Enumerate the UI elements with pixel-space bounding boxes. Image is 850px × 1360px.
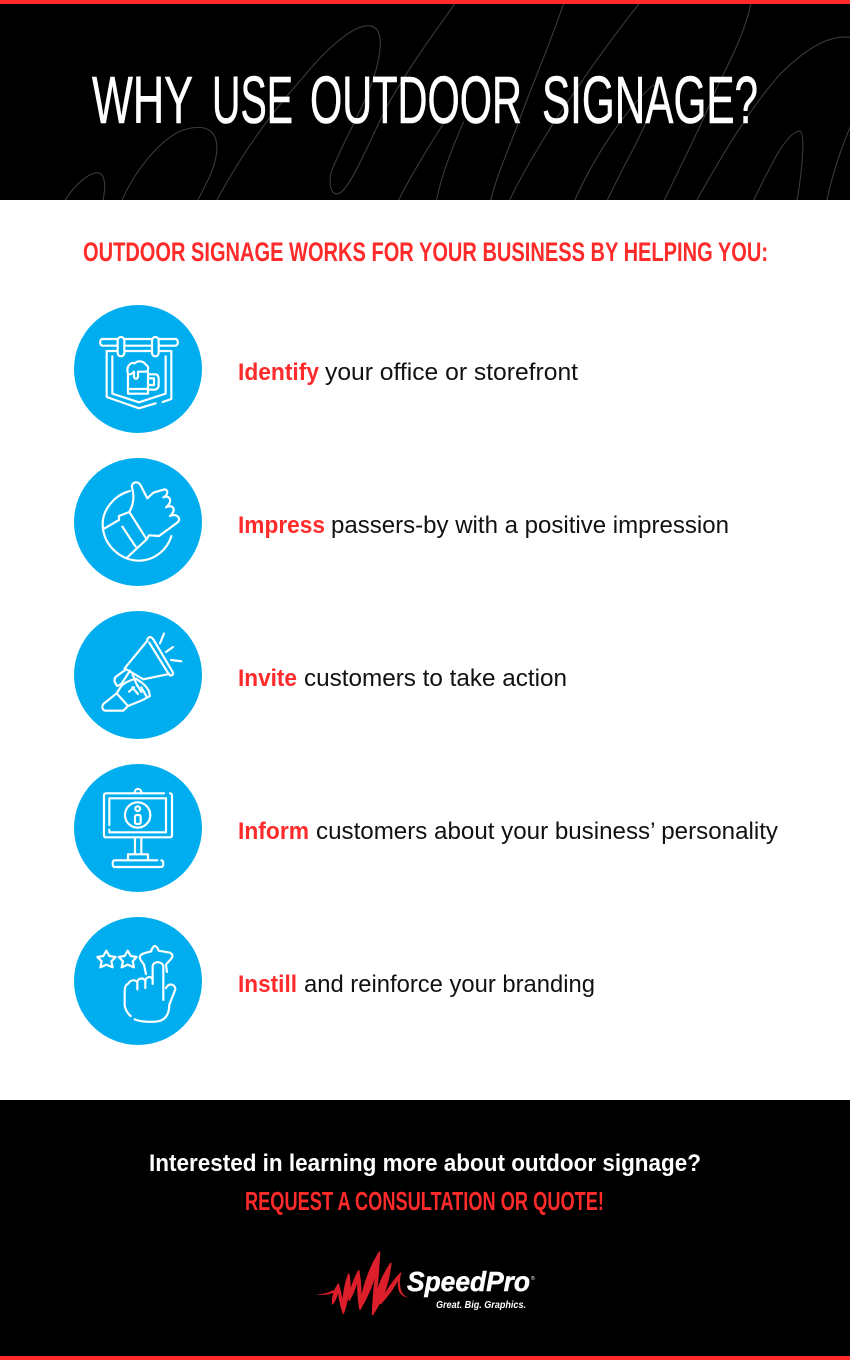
icon: megaphone in hand [74,611,202,739]
text: instill: Instill [238,971,297,998]
logo: SpeedPro: SpeedPro [407,1266,530,1297]
title: USE [212,63,293,138]
text: invite: Invite [238,665,297,692]
text: inform: customers about your business’ personality [316,818,778,845]
footer panel [0,1100,850,1360]
icon: thumbs up [74,458,202,586]
icon: star rating with pointing hand [74,917,202,1045]
text: identify: Identify [238,359,320,386]
footer question: Interested in learning more about outdoor signage? [149,1150,701,1177]
title: OUTDOOR [310,63,522,138]
icon: hanging pub sign with beer mug [74,305,202,433]
text: inform: Inform [238,818,309,845]
text: invite: customers to take action [304,665,567,692]
text: instill: and reinforce your branding [304,971,595,998]
logo: SpeedPro [317,1252,535,1314]
text: impress: passers-by with a positive impression [331,512,729,539]
header banner [0,0,850,200]
text: identify: your office or storefront [325,359,578,386]
logo: SpeedPro: Great. Big. Graphics. [436,1299,526,1311]
title: WHY [92,63,193,138]
text: impress: Impress [238,512,325,539]
icon: information board [74,764,202,892]
logo: SpeedPro: ® [531,1275,535,1282]
title [92,63,758,138]
call to action: REQUEST A CONSULTATION OR QUOTE! [245,1186,604,1216]
